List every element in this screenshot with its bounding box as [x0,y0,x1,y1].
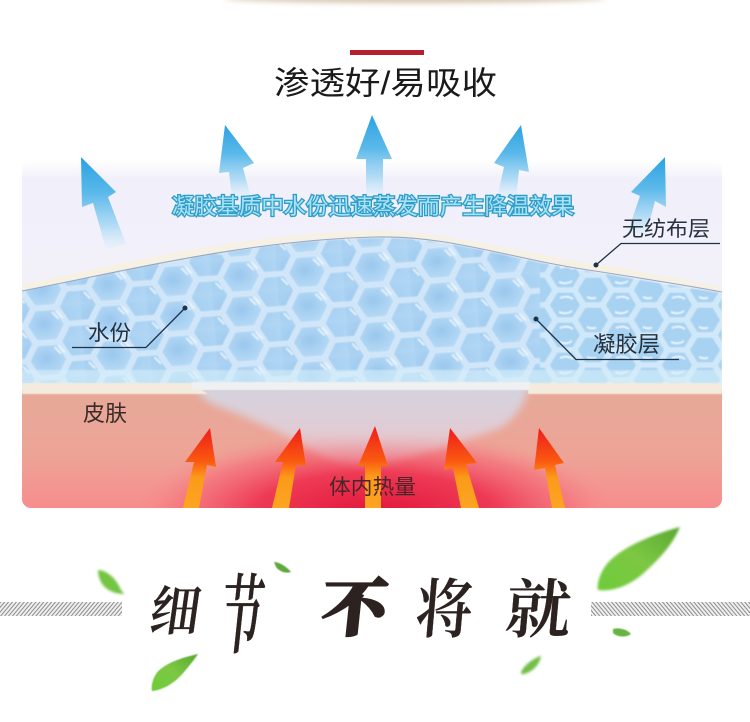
blue arrow 5 [627,157,666,236]
label: gel layer [534,316,679,360]
blue arrow 3 [356,115,392,198]
slogan in brush style: 细 [146,583,204,642]
label: body heat: 体内热量 [329,476,416,499]
slogan in brush style: 节 [216,570,268,665]
label: water: 水份 [88,322,131,345]
translucent film depression [193,383,529,466]
panel background [22,171,722,293]
fabric layer lower edge [22,237,722,292]
leaf: lower left [152,654,198,691]
product image remnant at top edge [225,0,605,3]
leaf: large top right [598,527,680,590]
heading accent bar [350,50,424,55]
red arrow 1 [183,428,216,508]
leaf: upper left small [98,570,124,594]
slogan in brush style: 不 [319,574,395,644]
label: non-woven layer: 无纺布层 [622,218,710,241]
red arrow 3 [358,426,388,508]
decorative stripe left [0,602,122,616]
blue arrow 1 [81,157,126,249]
red arrow 2 [272,428,306,508]
film top strip [192,382,530,390]
arrows: evaporation (blue) [81,115,666,249]
decorative stripe right [591,602,750,616]
label: skin: 皮肤 [83,401,127,426]
leaf: lower centre-right [521,656,541,674]
label: water [72,306,188,348]
leaf: small centre-top [274,562,291,573]
skin layer [22,390,722,508]
slogan in brush style: 将 [413,576,476,647]
skin top edge strip [22,383,722,394]
non-woven fabric layer [22,231,722,291]
leaf: small right [613,628,631,637]
label: gel layer: 凝胶层 [593,332,660,357]
slogan in brush style: 就 [503,576,574,647]
label: non-woven layer [594,218,720,268]
title: 渗透好/易吸收 [274,65,497,101]
blue arrow 2 [219,125,254,198]
blue arrow 4 [494,125,529,198]
red arrow 4 [444,428,479,508]
gel layer with hexagon cells [22,238,722,384]
red arrow 5 [534,428,565,508]
banner caption: 凝胶基质中水份迅速蒸发而产生降温效果 [172,194,574,219]
arrows: body heat (red) [183,426,565,508]
panel: cross-section diagram [22,160,722,508]
slogan in brush style [146,570,574,665]
